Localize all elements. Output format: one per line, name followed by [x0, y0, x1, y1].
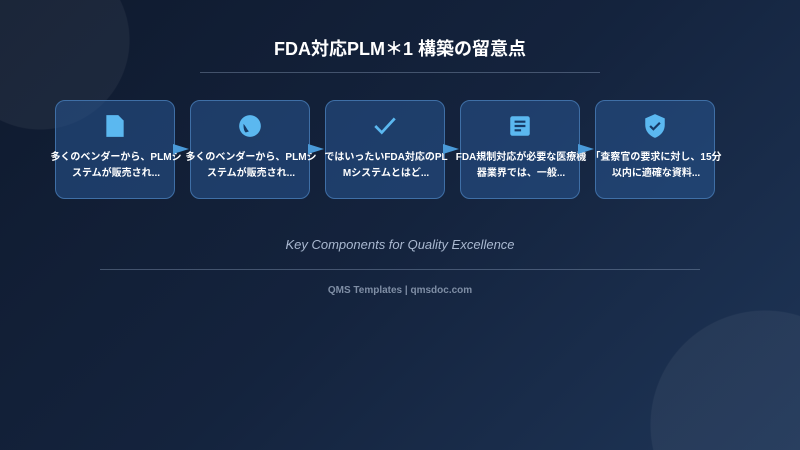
card 5: 「査察官の要求に対し、15分 — [590, 152, 722, 163]
icon: list — [510, 116, 530, 136]
card 2 — [190, 100, 310, 199]
icon: check — [374, 118, 396, 134]
card 4: 器業界では、一般... — [477, 168, 565, 179]
icon: document — [106, 115, 124, 137]
card 2: 多くのベンダーから、PLMシステムが販売され... — [185, 152, 317, 179]
icon: globe — [239, 115, 261, 137]
title: FDA対応PLM＊1 構築の留意点 — [274, 39, 526, 59]
card 1: 多くのベンダーから、PLMシステムが販売され... — [50, 152, 182, 179]
arrow 2 — [308, 144, 324, 154]
card 5: 以内に適確な資料... — [612, 168, 700, 179]
card 5 — [595, 100, 715, 199]
footer: QMS Templates | qmsdoc.com — [328, 285, 472, 296]
arrow 1 — [173, 144, 189, 154]
card 3: ではいったいFDA対応のPL — [324, 152, 448, 163]
card 3 — [325, 100, 445, 199]
card 1 — [55, 100, 175, 199]
arrow 3 — [443, 144, 459, 154]
subtitle: Key Components for Quality Excellence — [285, 237, 515, 252]
card 4 — [460, 100, 580, 199]
icon: shield — [645, 114, 665, 138]
card 4: FDA規制対応が必要な医療機 — [456, 152, 586, 163]
card 3: Mシステムとはど... — [343, 168, 429, 179]
arrow 4 — [578, 144, 594, 154]
